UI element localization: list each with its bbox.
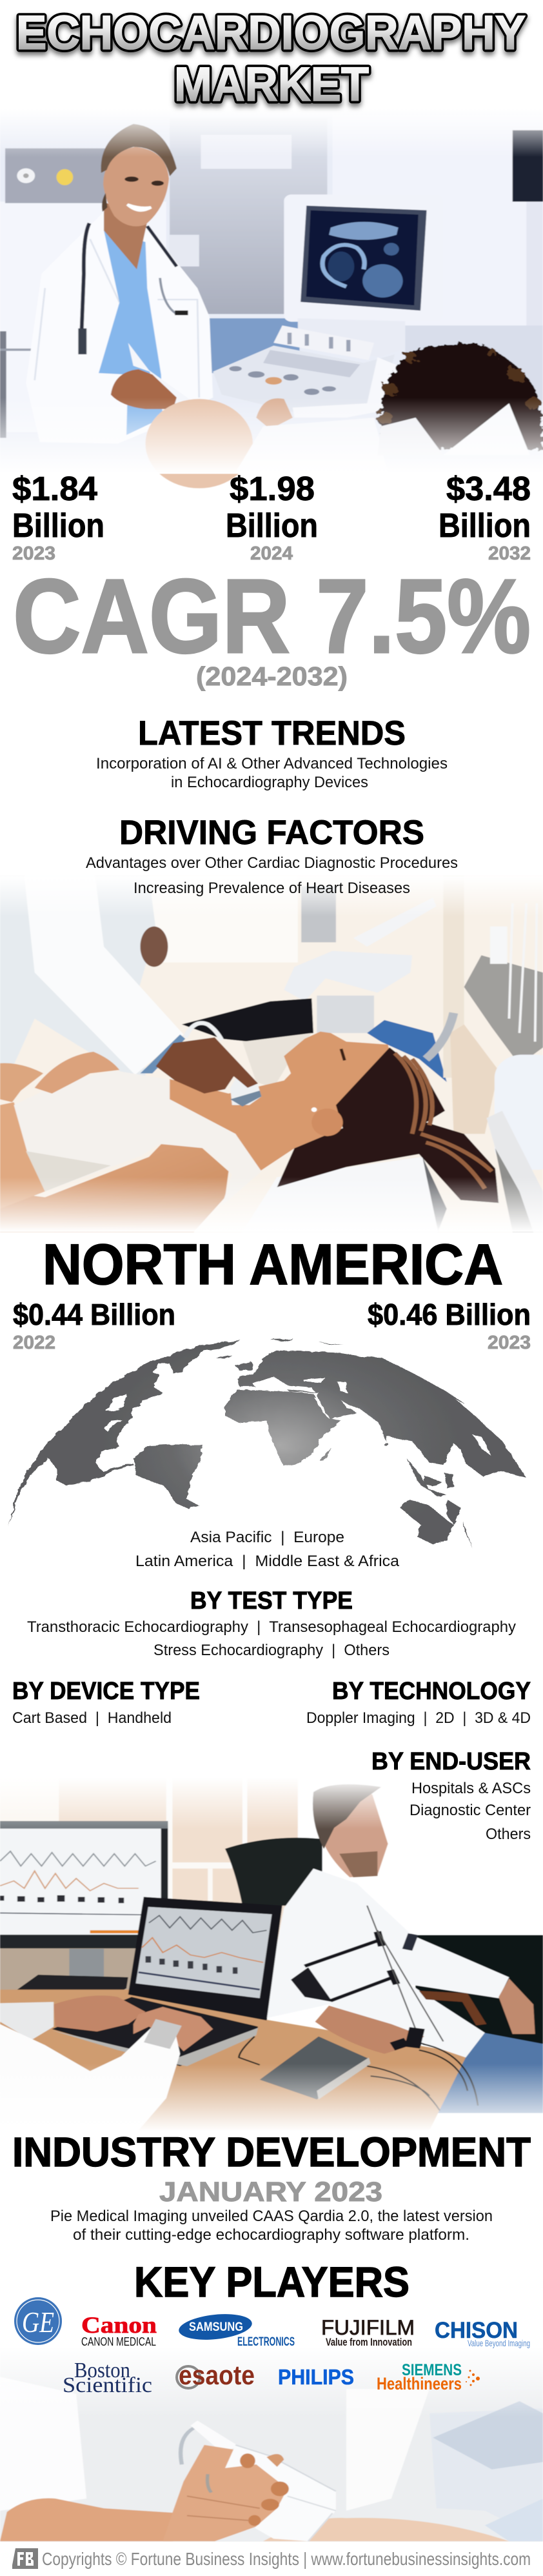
- industry development: [12, 2129, 531, 2244]
- latest trends: in Echocardiography Devices: [171, 774, 368, 791]
- segment: by end-user: BY END-USER: [371, 1748, 531, 1775]
- logo: Samsung Electronics: ELECTRONICS: [237, 2335, 295, 2349]
- stat: 2023 market size: [12, 470, 104, 564]
- title line 2: MARKET: [174, 57, 369, 111]
- logo: Boston Scientific: Boston: [74, 2359, 130, 2382]
- stat: North America 2022: [13, 1298, 175, 1353]
- stat: North America 2022: 2022: [13, 1333, 55, 1353]
- industry development: JANUARY 2023: [159, 2177, 382, 2208]
- world globe map: [8, 1339, 526, 1549]
- latest trends: LATEST TRENDS: [138, 714, 406, 752]
- segment: by test type: [27, 1587, 516, 1659]
- title: [16, 6, 526, 111]
- regional heading: North America: NORTH AMERICA: [43, 1232, 503, 1296]
- industry development: Pie Medical Imaging unveiled CAAS Qardia 2.0, the latest version: [50, 2208, 493, 2225]
- logo: Fujifilm: Value from Innovation: [326, 2336, 412, 2348]
- key players heading: KEY PLAYERS: [134, 2258, 410, 2306]
- photo: hand holding ultrasound probe: [0, 2346, 543, 2542]
- logo: Fujifilm: [321, 2316, 415, 2348]
- stat: 2032 market size: [439, 470, 531, 564]
- logo: Samsung Electronics: [177, 2311, 295, 2349]
- segment: by end-user: Others: [486, 1826, 531, 1843]
- segment: by test type: Transthoracic Echocardiography | Transesophageal Echocardiography: [27, 1618, 516, 1636]
- industry development: INDUSTRY DEVELOPMENT: [12, 2129, 531, 2175]
- logo: Boston Scientific: Scientific: [63, 2373, 152, 2397]
- CAGR headline: (2024-2032): [196, 661, 348, 691]
- other regions list: [135, 1529, 400, 1570]
- segment: by technology: [306, 1678, 531, 1727]
- stat: 2024 market size: [226, 470, 318, 564]
- title line 1: ECHOCARDIOGRAPHY: [16, 6, 526, 59]
- stat: 2023 market size: 2023: [12, 543, 55, 564]
- stat: 2024 market size: Billion: [226, 507, 318, 545]
- title line 2: MARKET: [174, 57, 369, 111]
- stat: North America 2023: [368, 1298, 531, 1353]
- segment: by device type: [12, 1678, 200, 1727]
- driving factors: DRIVING FACTORS: [119, 814, 424, 852]
- stat: North America 2023: 2023: [488, 1333, 531, 1353]
- stat: 2023 market size: Billion: [12, 507, 104, 545]
- latest trends: Incorporation of AI & Other Advanced Technologies: [96, 755, 448, 772]
- stat: 2024 market size: 2024: [250, 543, 293, 564]
- logo: Canon Medical: [81, 2312, 157, 2348]
- title line 1: ECHOCARDIOGRAPHY: [16, 6, 526, 59]
- segment: by end-user: Hospitals & ASCs: [411, 1780, 531, 1797]
- logo: Canon Medical: CANON MEDICAL: [81, 2335, 156, 2348]
- stat: North America 2022: $0.44 Billion: [13, 1298, 175, 1331]
- stat: North America 2023: $0.46 Billion: [368, 1298, 531, 1331]
- industry development: of their cutting-edge echocardiography software platform.: [73, 2226, 469, 2244]
- stat: 2032 market size: 2032: [488, 543, 531, 564]
- stat: 2024 market size: $1.98: [230, 470, 315, 508]
- stat: 2032 market size: Billion: [439, 507, 531, 545]
- driving factors: [86, 814, 458, 897]
- segment: by end-user: [371, 1748, 531, 1843]
- photo: doctor scanning patient's neck: [0, 876, 543, 1232]
- logo: GE: [14, 2297, 62, 2345]
- driving factors: Advantages over Other Cardiac Diagnostic Procedures: [86, 854, 458, 872]
- logo: Chison: CHISON: [435, 2318, 518, 2343]
- segment: by device type: BY DEVICE TYPE: [12, 1678, 200, 1705]
- logo: Philips: PHILIPS: [278, 2365, 354, 2389]
- logo: Fujifilm: FUJIFILM: [321, 2316, 415, 2339]
- other regions list: Latin America | Middle East & Africa: [135, 1553, 400, 1570]
- segment: by technology: BY TECHNOLOGY: [332, 1678, 531, 1705]
- other regions list: Asia Pacific | Europe: [190, 1529, 344, 1546]
- footer bar: [0, 2542, 543, 2576]
- stat: 2023 market size: $1.84: [12, 470, 97, 508]
- logo: Samsung Electronics: SAMSUNG: [189, 2320, 243, 2334]
- segment: by device type: Cart Based | Handheld: [12, 1709, 172, 1727]
- photo: doctor performing ultrasound with monitor: [0, 108, 543, 488]
- photo: patient connected to monitoring equipment: [0, 1777, 543, 2131]
- logo: Siemens Healthineers: [377, 2361, 480, 2393]
- logo: Esaote: esaote: [179, 2360, 255, 2390]
- driving factors: Increasing Prevalence of Heart Diseases: [133, 880, 410, 897]
- segment: by test type: BY TEST TYPE: [190, 1587, 353, 1615]
- segment: by technology: Doppler Imaging | 2D | 3D & 4D: [306, 1709, 531, 1727]
- logo: GE: GE: [22, 2306, 54, 2339]
- segment: by end-user: Diagnostic Center: [410, 1802, 531, 1819]
- stat: 2032 market size: $3.48: [446, 470, 531, 508]
- icon: Fortune Business Insights logo: [12, 2548, 38, 2569]
- logo: Canon Medical: Canon: [81, 2312, 157, 2338]
- logo: Boston Scientific: [63, 2359, 152, 2397]
- logo: Siemens Healthineers: SIEMENS: [402, 2361, 462, 2379]
- logo: Siemens Healthineers: Healthineers: [377, 2374, 462, 2393]
- segment: by test type: Stress Echocardiography | Others: [153, 1642, 390, 1659]
- latest trends: [96, 714, 448, 791]
